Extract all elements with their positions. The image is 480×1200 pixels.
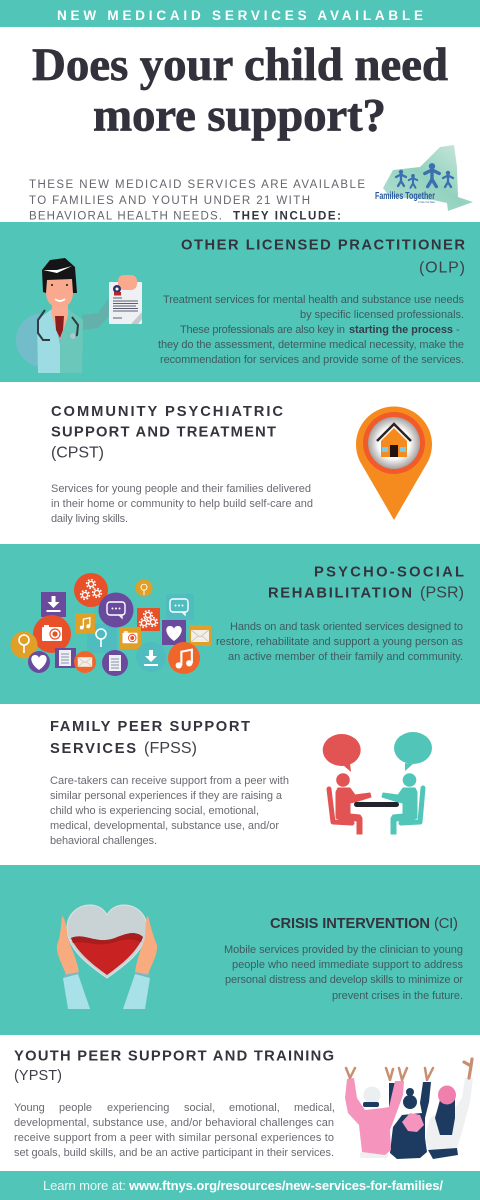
heading: (CI) bbox=[434, 915, 458, 932]
intro text bbox=[29, 179, 365, 222]
description: developmental, substance use, and/or behavioral challenges can bbox=[14, 1117, 334, 1129]
description: they do the assessment, determine medical necessity, make the bbox=[158, 339, 464, 351]
panel: OLP bbox=[0, 222, 480, 382]
description: an active member of their family and community. bbox=[228, 651, 463, 663]
description: personal distress and develop skills to minimize or bbox=[225, 974, 463, 986]
description bbox=[14, 1102, 335, 1159]
description bbox=[51, 483, 313, 525]
description: similar personal experiences if they are raising a bbox=[50, 790, 283, 802]
logo: Families Together bbox=[375, 145, 473, 211]
panel: PSR bbox=[0, 544, 480, 704]
intro text: TO FAMILIES AND YOUTH UNDER 21 WITH bbox=[29, 195, 310, 207]
illustration: cluster of app icons bbox=[10, 573, 211, 676]
heading: PSYCHO-SOCIAL bbox=[314, 564, 464, 580]
title: more support? bbox=[93, 90, 386, 142]
description: people who need immediate support to address bbox=[232, 959, 464, 971]
logo: Families Together: in New York State bbox=[418, 200, 435, 204]
description: Mobile services provided by the clinician to young bbox=[224, 944, 463, 956]
description: These professionals are also key in bbox=[180, 324, 345, 336]
heading: FAMILY PEER SUPPORT bbox=[50, 719, 250, 735]
top banner: NEW MEDICAID SERVICES AVAILABLE bbox=[57, 8, 423, 23]
description: in their home or community to help build self-care and bbox=[51, 498, 313, 510]
description: Care-takers can receive support from a peer with bbox=[50, 775, 289, 787]
panel: CPST bbox=[0, 382, 480, 544]
heading: (YPST) bbox=[14, 1068, 62, 1084]
description: receive support from a peer with similar personal experiences to bbox=[14, 1132, 334, 1144]
illustration: doctor holding a document bbox=[16, 258, 142, 373]
heading: SERVICES bbox=[50, 741, 136, 757]
title: Does your child need bbox=[32, 39, 448, 91]
description: Hands on and task oriented services designed to bbox=[230, 621, 463, 633]
heading bbox=[51, 404, 283, 462]
panel: FPSS bbox=[0, 704, 480, 865]
description: - bbox=[456, 324, 460, 336]
description: social, bbox=[184, 1102, 215, 1114]
footer bar: Learn more at: bbox=[43, 1178, 126, 1193]
heading: (OLP) bbox=[419, 260, 465, 276]
icon: two people talking at a table bbox=[323, 732, 432, 834]
illustration: hands holding a heart bbox=[57, 905, 157, 1009]
description bbox=[158, 294, 464, 366]
intro text: THEY INCLUDE: bbox=[233, 210, 341, 222]
heading: YOUTH PEER SUPPORT AND TRAINING bbox=[14, 1048, 334, 1064]
description: experiencing bbox=[107, 1102, 169, 1114]
heading: CRISIS INTERVENTION bbox=[270, 916, 430, 932]
heading bbox=[14, 1048, 334, 1084]
heading bbox=[268, 564, 464, 602]
description bbox=[50, 775, 289, 847]
description: Services for young people and their families delivered bbox=[51, 483, 311, 495]
description: prevent crises in the future. bbox=[332, 990, 463, 1002]
description: medical, bbox=[294, 1102, 335, 1114]
description bbox=[224, 944, 464, 1002]
description: daily living skills. bbox=[51, 513, 128, 525]
top banner bbox=[0, 0, 480, 27]
description: people bbox=[59, 1102, 92, 1114]
description: set goals, build skills, and be an active participant in their services. bbox=[14, 1147, 334, 1159]
description bbox=[216, 621, 464, 663]
intro text: BEHAVIORAL HEALTH NEEDS. bbox=[29, 210, 222, 222]
heading bbox=[181, 238, 465, 276]
footer bar: www.ftnys.org/resources/new-services-for-families/ bbox=[128, 1178, 443, 1193]
footer bar bbox=[0, 1171, 480, 1200]
heading: OTHER LICENSED PRACTITIONER bbox=[181, 238, 465, 254]
panel: CI bbox=[0, 865, 480, 1035]
description: recommendation for services and provide some of the services. bbox=[160, 354, 464, 366]
description: behavioral challenges. bbox=[50, 835, 157, 847]
description: child who is experiencing social, emotional, bbox=[50, 805, 259, 817]
heading: REHABILITATION bbox=[268, 586, 412, 602]
heading bbox=[50, 719, 250, 757]
heading: (PSR) bbox=[420, 584, 464, 602]
description: Treatment services for mental health and substance use needs bbox=[163, 294, 464, 306]
description: emotional, bbox=[229, 1102, 280, 1114]
icon: location pin with house bbox=[356, 407, 432, 520]
panel: YPST bbox=[0, 1035, 480, 1171]
heading: (CPST) bbox=[51, 444, 104, 462]
heading: (FPSS) bbox=[144, 740, 197, 757]
intro text: THESE NEW MEDICAID SERVICES ARE AVAILABLE bbox=[29, 179, 365, 191]
heading: COMMUNITY PSYCHIATRIC bbox=[51, 404, 283, 420]
description: Young bbox=[14, 1102, 45, 1114]
illustration: three young people cheering from behind bbox=[345, 1059, 473, 1159]
heading: SUPPORT AND TREATMENT bbox=[51, 424, 276, 440]
logo: Families Together: Families Together bbox=[375, 191, 435, 202]
title bbox=[32, 39, 448, 142]
description: medical, developmental, substance use, and/or bbox=[50, 820, 279, 832]
description: by specific licensed professionals. bbox=[300, 309, 464, 321]
description: restore, rehabilitate and support a young person as bbox=[216, 636, 464, 648]
description: starting the process bbox=[349, 324, 453, 336]
